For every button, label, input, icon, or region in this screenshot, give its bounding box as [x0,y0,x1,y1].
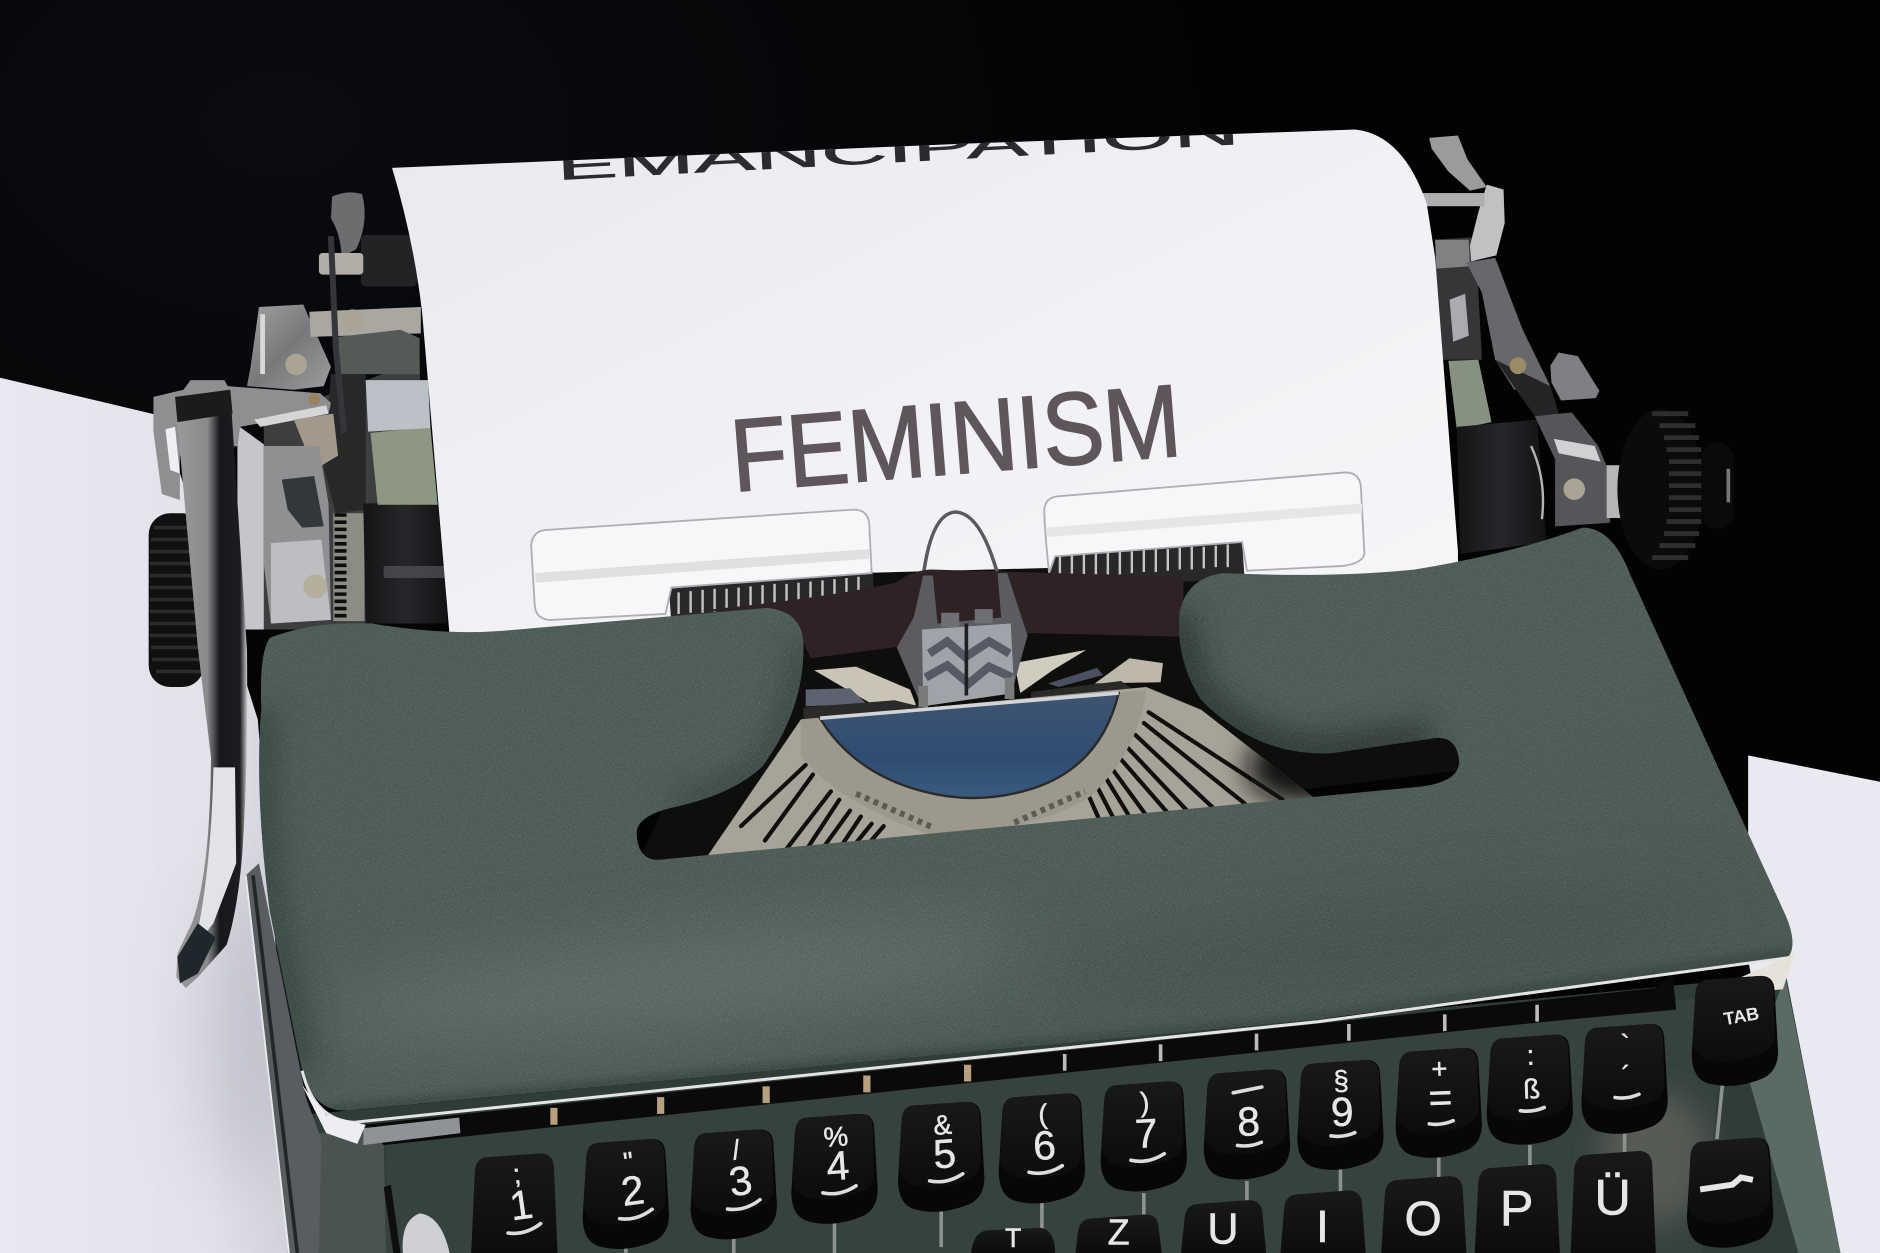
key Z: Z [1108,1212,1130,1253]
cast plate [247,305,331,390]
rod right [1418,193,1484,206]
platen roller right [1457,420,1547,554]
key 6 [999,1093,1085,1203]
key stems [626,1079,1723,1253]
screws [342,309,363,331]
key 4: % [823,1120,849,1153]
key = [1396,1048,1482,1158]
key I: I [1316,1201,1329,1252]
green block left [370,427,438,505]
silver band [801,689,1146,836]
right mechanism [1418,135,1610,554]
long arm [1466,258,1550,390]
key 6: ( [1037,1098,1049,1130]
ribbon [701,570,1183,658]
chrome screw [403,1213,450,1253]
key 1: ; [511,1158,523,1190]
key backspace [1687,1138,1773,1248]
key 2 [583,1139,669,1249]
paper lever left [331,192,365,257]
right knob [1607,409,1734,570]
white wedges [814,667,916,705]
key Z [1075,1212,1162,1253]
key 1: 1 [507,1181,536,1229]
key T: T [1005,1223,1021,1253]
key accent: ` [1620,1029,1630,1060]
paper guide glass right [1044,472,1364,573]
key 3: / [730,1134,742,1166]
key 7: ) [1139,1086,1150,1118]
key 5 [898,1102,984,1212]
key U: U [1207,1205,1239,1253]
key accent [1581,1024,1668,1134]
roller stub left [361,235,417,287]
key ß [1487,1035,1573,1145]
key T [971,1223,1055,1253]
bracket [153,380,331,500]
type basket fan [707,650,1355,856]
key I [1281,1191,1366,1253]
key TAB [1692,976,1778,1086]
key 8 [1204,1069,1290,1179]
left mechanism [153,192,447,629]
table: right white surface [1748,755,1880,1253]
key P: P [1500,1179,1534,1236]
key ß: ß [1523,1073,1541,1105]
table: left white surface [0,378,300,1253]
key =: + [1431,1053,1448,1084]
lid: green cover [240,516,1810,1127]
chrome trim under lid [302,953,1795,1144]
key =: = [1428,1074,1453,1121]
wire hairpin [922,512,1001,588]
key 4: 4 [825,1142,851,1189]
silver block [366,380,430,432]
key TAB: TAB [1722,1003,1761,1029]
key P [1475,1164,1560,1253]
body: keyboard deck [246,863,1840,1253]
type guide [897,573,1028,707]
paper sheet [392,110,1458,635]
key 1 [471,1153,558,1253]
hole background under cover [635,564,1487,869]
key U [1181,1200,1266,1253]
typed word: FEMINISM: FEMINISM [726,363,1185,514]
key 7: 7 [1134,1110,1159,1157]
key O: O [1405,1193,1442,1246]
gear [333,513,364,621]
paper guide glass left [531,510,872,620]
keys: top row [471,976,1778,1253]
fan slots [741,712,1283,849]
key O [1381,1176,1466,1253]
key 2: 2 [618,1166,647,1215]
key 5: 5 [932,1130,957,1177]
key 9 [1297,1060,1384,1170]
key 3: 3 [726,1157,755,1205]
wire arm [331,236,344,433]
key 4 [791,1114,878,1224]
key 9: 9 [1330,1088,1354,1135]
small lever [1550,353,1599,400]
left knob [149,513,204,687]
key Ü [1571,1151,1656,1253]
paper lever right [1429,135,1487,191]
key 3 [691,1129,777,1239]
fan plate [707,687,1316,856]
keys: second row [971,1138,1773,1253]
metal comb left [669,572,875,626]
carriage return lever [175,390,247,988]
key slot strip [363,974,1676,1145]
slot on deck [384,1185,400,1253]
key 9: § [1333,1065,1349,1096]
key 2: " [622,1146,636,1178]
key 6: 6 [1032,1122,1057,1169]
metal comb right [1049,542,1245,590]
key 5: & [932,1109,953,1141]
key accent: ´ [1621,1060,1631,1091]
key ß: : [1526,1040,1535,1071]
key Ü: Ü [1594,1169,1631,1226]
silver collar [319,253,363,275]
key 7 [1101,1081,1187,1191]
blue half-disc [820,693,1119,798]
side plate [1535,412,1610,526]
body side [246,863,321,1253]
chrome hook [1470,185,1505,261]
typed word: EMANCIPATION: EMANCIPATION [556,110,1240,188]
platen roller left [363,501,447,624]
green block right [1448,360,1492,429]
key 8: 8 [1236,1098,1261,1145]
chrome side plate [264,446,331,624]
